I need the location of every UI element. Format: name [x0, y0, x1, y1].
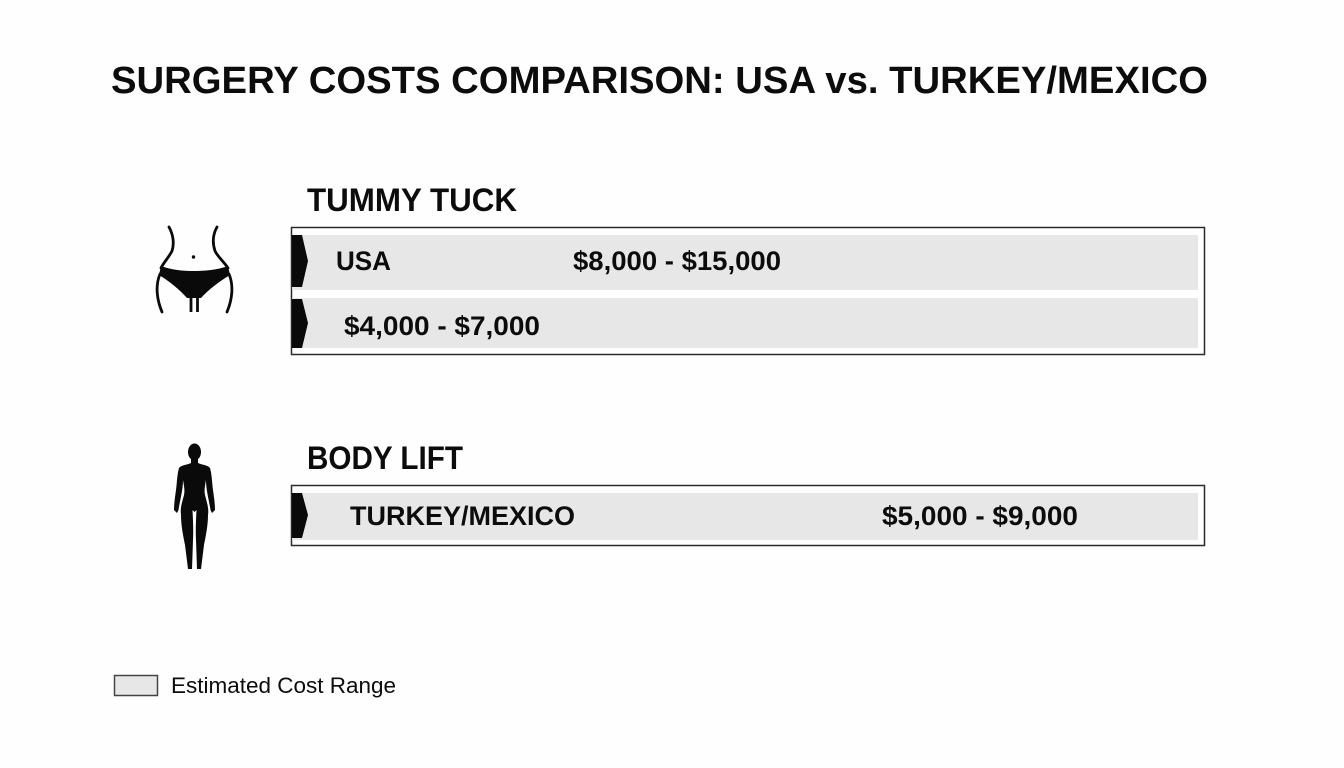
bar: Turkey/Mexico cost: $5,000 - $9,000 — [882, 501, 1078, 531]
title: SURGERY COSTS COMPARISON: USA vs. TURKEY/MEXICO — [111, 60, 1208, 102]
icon: waist and abdomen — [157, 227, 232, 312]
section heading: body lift: BODY LIFT — [307, 440, 463, 476]
bar: Turkey/Mexico cost — [292, 493, 1198, 540]
panel: body lift costs — [292, 486, 1204, 546]
panel: tummy tuck costs — [292, 228, 1204, 354]
legend swatch — [114, 676, 158, 696]
legend label: Estimated Cost Range — [171, 673, 396, 698]
bar: USA cost — [292, 235, 1198, 290]
bar: Turkey/Mexico cost — [292, 298, 1198, 348]
bar: Turkey/Mexico cost: $4,000 - $7,000 — [344, 311, 540, 341]
icon: body silhouette — [174, 444, 215, 569]
bar: USA cost: USA — [336, 246, 391, 276]
section heading: tummy tuck: TUMMY TUCK — [307, 182, 517, 218]
bar: USA cost: $8,000 - $15,000 — [573, 246, 781, 276]
bar: Turkey/Mexico cost: TURKEY/MEXICO — [350, 501, 575, 531]
legend — [114, 673, 396, 698]
